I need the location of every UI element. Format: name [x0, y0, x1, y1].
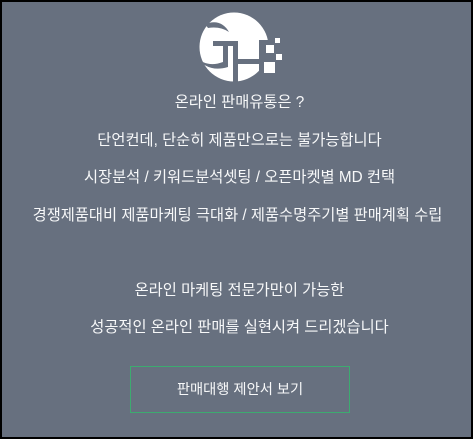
icon: GH logo	[200, 12, 282, 82]
text: line six: 성공적인 온라인 판매를 실현시켜 드리겠습니다	[90, 319, 389, 336]
text: question heading: 온라인 판매유통은 ?	[175, 94, 304, 111]
text: line two: 단언컨데, 단순히 제품만으로는 불가능합니다	[97, 132, 382, 149]
text: line three: 시장분석 / 키워드분석셋팅 / 오픈마켓별 MD 컨택	[84, 169, 395, 186]
text: line four: 경쟁제품대비 제품마케팅 극대화 / 제품수명주기별 판매계획 수립	[33, 207, 442, 224]
text: line five: 온라인 마케팅 전문가만이 가능한	[135, 282, 344, 299]
button: view proposal	[130, 366, 350, 413]
button: view proposal: 판매대행 제안서 보기	[177, 382, 303, 398]
